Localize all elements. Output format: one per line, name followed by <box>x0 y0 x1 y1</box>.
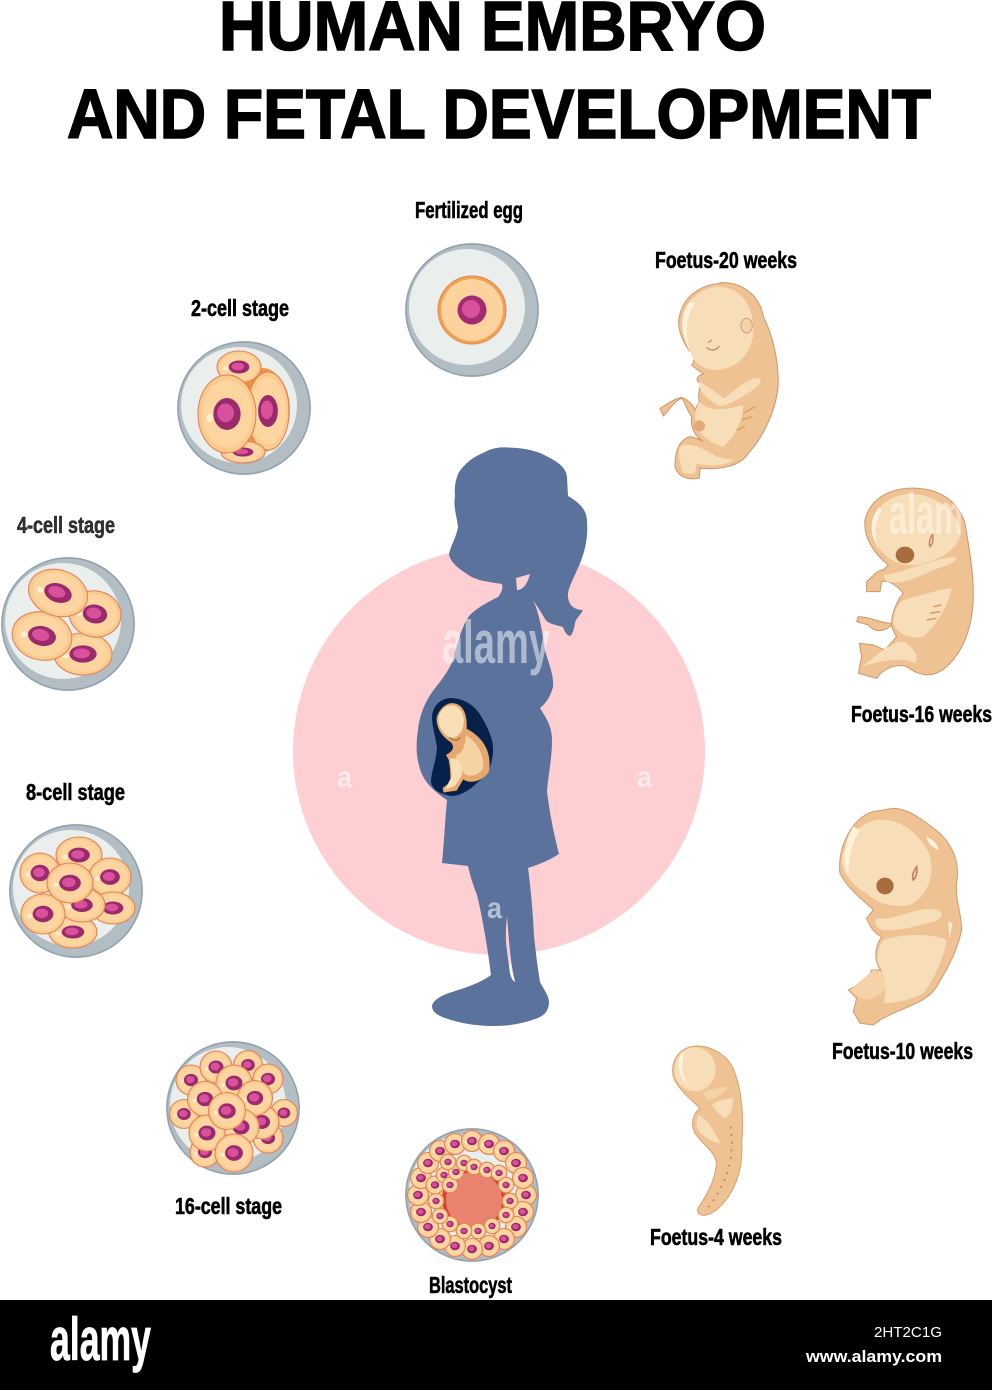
watermark: alamy on silhouette: alamy <box>442 609 550 676</box>
label: Fertilized egg <box>415 197 523 223</box>
label: Foetus-4 weeks <box>650 1224 782 1250</box>
watermark letters: a <box>337 761 352 794</box>
foetus 4 weeks illustration <box>673 1046 743 1215</box>
stage: foetus 10 weeks <box>832 808 973 1064</box>
label: Foetus-20 weeks <box>655 247 797 273</box>
footer bar <box>0 1300 992 1390</box>
small foetus in womb <box>437 703 490 793</box>
label: 2-cell stage <box>191 295 289 321</box>
pink background circle <box>293 547 705 955</box>
foetus 20 weeks illustration <box>660 283 778 479</box>
2-cell illustration <box>177 341 311 475</box>
watermark letters: a <box>487 892 502 925</box>
stage: 16-cell <box>166 1041 300 1219</box>
stage: fertilized egg <box>405 197 539 377</box>
title: AND FETAL DEVELOPMENT <box>67 75 931 153</box>
4-cell illustration <box>1 557 135 691</box>
footer image id and url <box>805 1324 942 1366</box>
stage: foetus 16 weeks <box>851 482 992 727</box>
footer logo: alamy <box>50 1306 151 1373</box>
stage: foetus 4 weeks <box>650 1046 782 1250</box>
16-cell illustration <box>166 1041 300 1175</box>
foetus 16 weeks illustration <box>857 488 973 678</box>
label: Blastocyst <box>429 1272 512 1298</box>
egg illustration <box>405 243 539 377</box>
foetus 10 weeks illustration <box>840 808 962 1025</box>
title <box>67 0 931 153</box>
footer image id and url: 2HT2C1G <box>874 1324 942 1341</box>
stage: blastocyst <box>405 1128 539 1298</box>
neck gap <box>516 574 530 590</box>
watermark letters <box>337 761 652 925</box>
label: 4-cell stage <box>17 512 115 538</box>
footer image id and url: www.alamy.com <box>805 1347 942 1366</box>
label: 16-cell stage <box>175 1193 282 1219</box>
pregnant woman silhouette <box>417 447 587 1026</box>
stage: 2-cell <box>177 295 311 475</box>
leg gap <box>506 916 515 982</box>
label: 8-cell stage <box>26 779 125 805</box>
watermark letters: a <box>637 761 652 794</box>
blastocyst illustration <box>405 1128 539 1262</box>
womb <box>431 698 493 796</box>
stage: 8-cell <box>9 779 143 958</box>
stage: foetus 20 weeks <box>655 247 797 479</box>
8-cell illustration <box>9 824 143 958</box>
stage: 4-cell <box>1 512 135 691</box>
